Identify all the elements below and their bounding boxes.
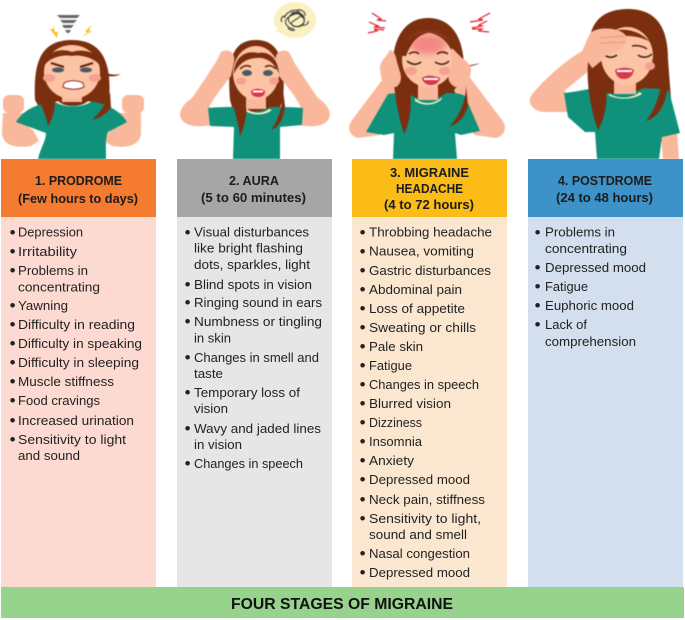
heading: migraine headache: 3. MIGRAINE xyxy=(390,165,469,180)
list: aura symptoms: Wavy and jaded lines xyxy=(194,422,321,436)
list: prodrome symptoms: • xyxy=(10,296,16,315)
list: prodrome symptoms: Increased urination xyxy=(18,414,134,428)
list: aura symptoms: • xyxy=(185,383,191,402)
list: migraine symptoms: • xyxy=(360,470,366,489)
list: aura symptoms: • xyxy=(185,312,191,331)
list: aura symptoms: dots, sparkles, light xyxy=(194,258,311,272)
list: aura symptoms: • xyxy=(185,419,191,438)
heading: aura xyxy=(177,159,332,217)
list: prodrome symptoms: Problems in xyxy=(18,264,88,278)
icon: red pain bolts right xyxy=(470,13,490,32)
list: prodrome symptoms: Difficulty in reading xyxy=(18,318,135,332)
list: prodrome symptoms: • xyxy=(10,353,16,372)
list: aura symptoms: Changes in smell and xyxy=(194,351,319,365)
list: aura symptoms: Changes in speech xyxy=(194,457,303,471)
list: aura symptoms xyxy=(185,223,322,473)
list: postdrome symptoms: Euphoric mood xyxy=(545,299,634,313)
heading: prodrome xyxy=(1,159,156,217)
list: migraine symptoms: Nasal congestion xyxy=(369,547,470,561)
title banner: four stages of migraine: FOUR STAGES OF MIGRAINE xyxy=(231,596,453,613)
panel: prodrome xyxy=(1,159,156,587)
list: aura symptoms: in skin xyxy=(194,332,231,346)
list: prodrome symptoms: Difficulty in speaking xyxy=(18,337,142,351)
list: postdrome symptoms: comprehension xyxy=(545,335,636,349)
list: postdrome symptoms: Lack of xyxy=(545,318,588,332)
list: migraine symptoms: Changes in speech xyxy=(369,378,479,392)
illustration: woman with hand on forehead (postdrome) xyxy=(530,9,680,159)
list: migraine symptoms: Fatigue xyxy=(369,359,412,373)
list: migraine symptoms: Blurred vision xyxy=(369,397,451,411)
list: aura symptoms: taste xyxy=(194,367,223,381)
list: migraine symptoms: Loss of appetite xyxy=(369,302,465,316)
panel: migraine headache xyxy=(352,159,507,587)
list: aura symptoms: Numbness or tingling xyxy=(194,315,322,329)
panel: postdrome xyxy=(528,159,683,587)
list: prodrome symptoms: Yawning xyxy=(18,299,68,313)
list: aura symptoms: • xyxy=(185,293,191,312)
heading: postdrome: (24 to 48 hours) xyxy=(556,190,653,205)
heading: prodrome: 1. PRODROME xyxy=(35,173,122,188)
icon: red pain bolts left xyxy=(368,13,386,33)
list: aura symptoms: • xyxy=(185,223,191,242)
list: postdrome symptoms: • xyxy=(535,296,541,315)
list: migraine symptoms: • xyxy=(360,223,366,242)
list: migraine symptoms: • xyxy=(360,280,366,299)
list: aura symptoms: vision xyxy=(194,402,228,416)
list: aura symptoms: like bright flashing xyxy=(194,242,303,256)
list: prodrome symptoms: • xyxy=(10,334,16,353)
list: migraine symptoms: Throbbing headache xyxy=(369,226,492,240)
list: postdrome symptoms: Problems in xyxy=(545,226,615,240)
list: migraine symptoms: • xyxy=(360,394,366,413)
list: prodrome symptoms: • xyxy=(10,223,16,242)
list: migraine symptoms: • xyxy=(360,413,366,432)
list: aura symptoms: • xyxy=(185,454,191,473)
list: migraine symptoms: • xyxy=(360,509,366,528)
list: aura symptoms: • xyxy=(185,275,191,294)
list: aura symptoms: Temporary loss of xyxy=(194,386,301,400)
list: migraine symptoms: • xyxy=(360,261,366,280)
list: migraine symptoms: • xyxy=(360,318,366,337)
list: aura symptoms: in vision xyxy=(194,438,242,452)
heading: postdrome: 4. POSTDROME xyxy=(558,173,652,188)
list: migraine symptoms: sound and smell xyxy=(369,528,467,542)
list: aura symptoms: • xyxy=(185,348,191,367)
title banner: four stages of migraine xyxy=(1,587,684,618)
list: migraine symptoms: • xyxy=(360,544,366,563)
icon: tornado and lightning xyxy=(50,15,92,38)
list: postdrome symptoms: • xyxy=(535,315,541,334)
heading: aura: 2. AURA xyxy=(229,173,280,188)
list: migraine symptoms: Abdominal pain xyxy=(369,283,462,297)
list: migraine symptoms: • xyxy=(360,299,366,318)
panel: aura xyxy=(177,159,332,587)
list: prodrome symptoms: and sound xyxy=(18,449,80,463)
list: postdrome symptoms: concentrating xyxy=(545,242,627,256)
illustration: woman with headache (migraine) xyxy=(349,13,505,159)
list: postdrome symptoms: • xyxy=(535,223,541,242)
list: migraine symptoms: • xyxy=(360,356,366,375)
list: postdrome symptoms: Fatigue xyxy=(545,280,588,294)
list: postdrome symptoms: Depressed mood xyxy=(545,261,646,275)
list: migraine symptoms: Insomnia xyxy=(369,435,422,449)
list: aura symptoms: Visual disturbances xyxy=(194,226,309,240)
list: migraine symptoms: Pale skin xyxy=(369,340,423,354)
list: migraine symptoms: • xyxy=(360,375,366,394)
list: aura symptoms: Blind spots in vision xyxy=(194,278,312,292)
list: aura symptoms: Ringing sound in ears xyxy=(194,296,322,310)
list: prodrome symptoms: • xyxy=(10,315,16,334)
list: migraine symptoms: Depressed mood xyxy=(369,473,470,487)
list: migraine symptoms: • xyxy=(360,432,366,451)
heading: prodrome: (Few hours to days) xyxy=(18,191,138,206)
list: prodrome symptoms: Difficulty in sleeping xyxy=(18,356,139,370)
list: migraine symptoms: Sensitivity to light, xyxy=(369,512,481,526)
list: prodrome symptoms: Muscle stiffness xyxy=(18,375,114,389)
illustration: woman confused (aura) xyxy=(180,2,330,159)
list: prodrome symptoms: Sensitivity to light xyxy=(18,433,127,447)
list: prodrome symptoms: • xyxy=(10,391,16,410)
list: migraine symptoms: • xyxy=(360,451,366,470)
list: migraine symptoms: Sweating or chills xyxy=(369,321,476,335)
list: migraine symptoms: Nausea, vomiting xyxy=(369,244,474,258)
list: migraine symptoms: Gastric disturbances xyxy=(369,264,491,278)
list: prodrome symptoms: Depression xyxy=(18,226,83,240)
list: prodrome symptoms: Irritability xyxy=(18,245,78,259)
list: migraine symptoms: • xyxy=(360,242,366,261)
heading: migraine headache: HEADACHE xyxy=(396,181,463,196)
list: prodrome symptoms: • xyxy=(10,261,16,280)
list: postdrome symptoms xyxy=(535,223,646,349)
list: migraine symptoms: Dizziness xyxy=(369,416,422,430)
list: postdrome symptoms: • xyxy=(535,258,541,277)
heading: migraine headache xyxy=(352,159,507,217)
list: prodrome symptoms: concentrating xyxy=(18,280,100,294)
illustration: woman angry (prodrome) xyxy=(2,15,144,159)
list: migraine symptoms: • xyxy=(360,490,366,509)
heading: migraine headache: (4 to 72 hours) xyxy=(384,197,474,212)
list: prodrome symptoms xyxy=(10,223,142,463)
heading: aura: (5 to 60 minutes) xyxy=(201,190,306,205)
list: prodrome symptoms: Food cravings xyxy=(18,394,100,408)
list: migraine symptoms: • xyxy=(360,337,366,356)
list: migraine symptoms xyxy=(360,223,492,582)
list: postdrome symptoms: • xyxy=(535,277,541,296)
list: prodrome symptoms: • xyxy=(10,372,16,391)
icon: thought bubble with scribble xyxy=(273,2,316,38)
list: migraine symptoms: Depressed mood xyxy=(369,566,470,580)
list: prodrome symptoms: • xyxy=(10,411,16,430)
list: migraine symptoms: Neck pain, stiffness xyxy=(369,493,485,507)
list: migraine symptoms: Anxiety xyxy=(369,454,415,468)
list: migraine symptoms: • xyxy=(360,563,366,582)
list: prodrome symptoms: • xyxy=(10,430,16,449)
heading: postdrome xyxy=(528,159,683,217)
list: prodrome symptoms: • xyxy=(10,242,16,261)
